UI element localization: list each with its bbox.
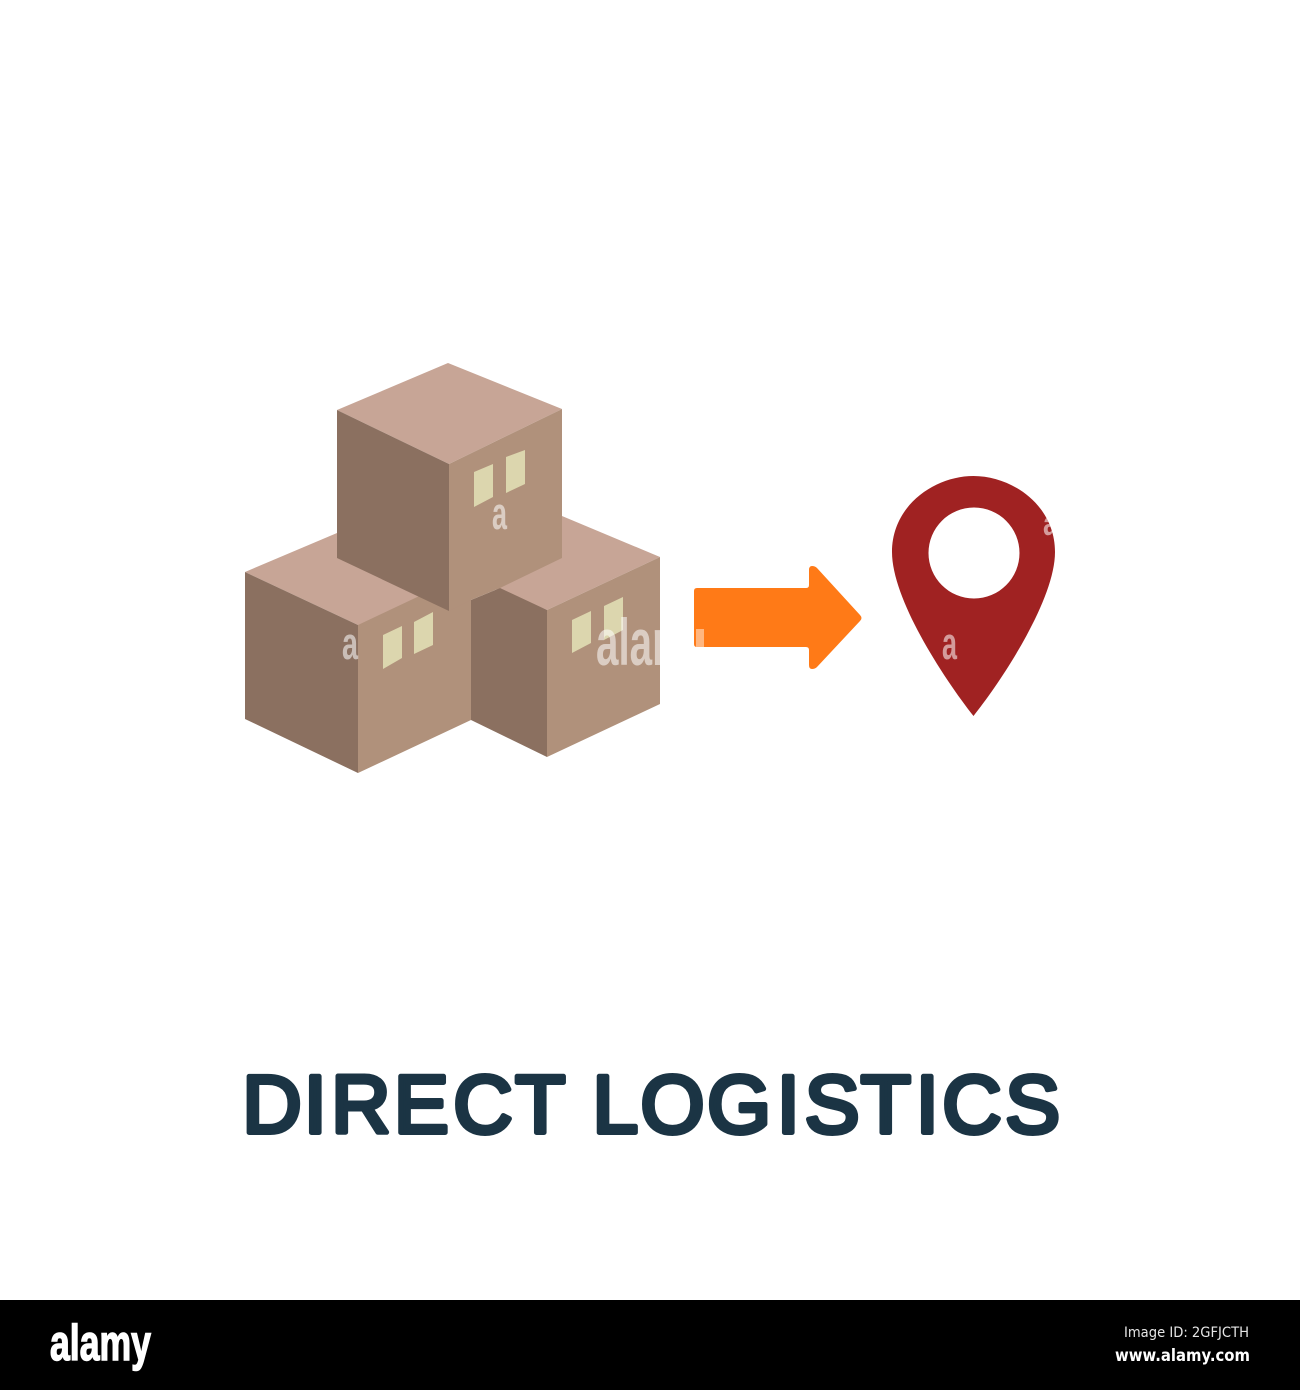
box: lower left [245,533,471,773]
image id: Image ID: 2GFJCTH [1124,1325,1249,1341]
icon: stacked cardboard boxes [245,363,660,773]
watermark fragments: a [942,618,958,669]
watermark fragments [342,504,1052,666]
icon: orange arrow [694,566,862,669]
box: lower right [450,516,660,757]
watermark fragments: a [492,488,508,539]
watermark fragments: a [1043,505,1059,543]
watermark fragments: alam [596,605,688,679]
alamy logo: alamy [50,1315,151,1371]
box: top [337,363,562,611]
website: www.alamy.com [1115,1346,1250,1366]
icon: location pin [892,476,1055,716]
title: DIRECT LOGISTICS [242,1060,1060,1150]
footer bar [0,1300,1300,1390]
watermark fragments: a [342,618,359,669]
